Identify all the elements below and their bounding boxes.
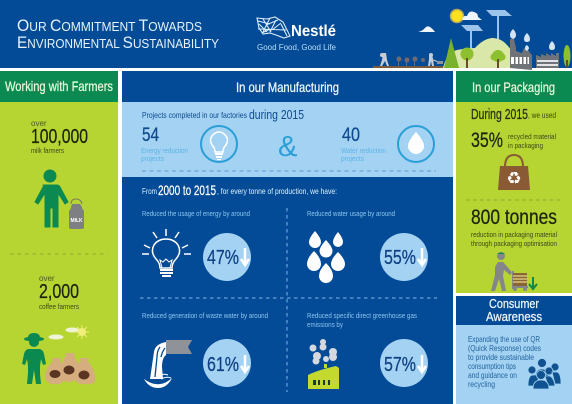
text: from 2000 to 2015 — [142, 182, 337, 198]
stat: 61%: 61% — [207, 354, 239, 376]
icon: bulb in circle — [201, 126, 237, 162]
title: OUR COMMITMENT TOWARDS — [17, 16, 202, 35]
icon: Nestle nest logo — [257, 17, 290, 38]
stat: energy projects: Energy reduction — [141, 146, 188, 155]
text: consumer awareness body: consumption tips — [468, 362, 516, 371]
heading: consumer awareness: Consumer — [489, 296, 540, 311]
text: projects heading: Projects completed in our factories — [142, 110, 247, 120]
text: consumer awareness body: (Quick Response) codes — [468, 344, 541, 353]
illustration: green landscape with factory — [373, 10, 570, 70]
stat: water projects: projects — [341, 154, 364, 163]
stat: milk farmers: 100,000 — [31, 126, 88, 148]
block: water reduction: Reduced water usage by around — [307, 209, 395, 218]
icon: group of people — [528, 358, 561, 389]
heading: in our manufacturing: In our Manufacturing — [236, 79, 339, 95]
logo wordmark: Nestlé — [291, 23, 336, 40]
panel: consumer awareness — [456, 296, 572, 404]
heading: consumer awareness — [456, 296, 572, 325]
title — [17, 16, 219, 52]
title: ENVIRONMENTAL SUSTAINABILITY — [17, 33, 219, 52]
stat: 35% recycled — [471, 129, 556, 152]
block: greenhouse gas reduction: emissions by — [307, 320, 343, 329]
stat: energy projects: 54 — [142, 125, 159, 146]
block: waste water reduction — [142, 311, 268, 388]
stat: 800 tonnes — [471, 206, 557, 248]
block: greenhouse gas reduction: Reduced specific direct greenhouse gas — [307, 311, 417, 320]
text: during 2015 we used: , we used — [528, 111, 556, 120]
icon: water drops — [307, 231, 345, 283]
icon: recycling bag — [498, 155, 530, 190]
stat: coffee farmers: 2,000 — [39, 281, 79, 303]
heading: consumer awareness: Awareness — [486, 309, 542, 324]
text: consumer awareness body: Expanding the use of QR — [468, 335, 540, 344]
panel: working with farmers — [0, 71, 118, 404]
stat: coffee farmers: over — [39, 274, 55, 283]
block: greenhouse gas reduction — [307, 311, 428, 389]
heading: working with farmers — [0, 71, 118, 102]
logo wordmark — [257, 23, 336, 52]
icon: waste water pipe — [144, 340, 192, 388]
stat: 55%: 55% — [384, 247, 416, 269]
icon: drop in circle — [398, 126, 434, 162]
stat: 35% recycled: in packaging — [508, 141, 543, 150]
text: consumer awareness body: to provide sustainable — [468, 353, 534, 362]
stat: 800 tonnes: 800 tonnes — [471, 206, 557, 229]
block: waste water reduction: Reduced generation of waste water by around — [142, 311, 268, 320]
stat: 47%: 47% — [207, 247, 239, 269]
stat: 57%: 57% — [384, 354, 416, 376]
block: energy reduction: Reduced the usage of energy by around — [142, 209, 250, 218]
stat: milk farmers — [31, 119, 88, 155]
text: during 2015 we used: During 2015 — [471, 106, 528, 123]
stat: 35% recycled: 35% — [471, 129, 503, 152]
text: consumer awareness body: and guidance on — [468, 371, 517, 380]
text: from 2000 to 2015: 2000 to 2015 — [158, 182, 216, 198]
stat: coffee farmers: coffee farmers — [39, 302, 79, 311]
stat: milk farmers: milk farmers — [31, 146, 64, 155]
ampersand: & — [278, 131, 297, 163]
panel: in our manufacturing — [122, 71, 453, 404]
header band — [0, 0, 572, 70]
stat: water projects: 40 — [342, 125, 360, 146]
heading: working with farmers: Working with Farmers — [5, 78, 113, 94]
heading: in our packaging — [456, 71, 572, 102]
stat: 800 tonnes: through packaging optimisation — [471, 239, 557, 248]
logo wordmark: Good Food, Good Life — [257, 42, 336, 52]
text: during 2015: during 2015 — [249, 107, 304, 122]
panel: projects completed — [122, 102, 453, 177]
text: from 2000 to 2015: , for every tonne of production, we have: — [217, 186, 337, 196]
icon: recycling bag: ♻ — [506, 169, 522, 189]
block: energy reduction — [142, 209, 251, 281]
stat: milk farmers: over — [31, 119, 47, 128]
stat: 35% recycled: recycled material — [508, 132, 556, 141]
icon: coffee farmer with sacks — [22, 325, 95, 384]
stat: 800 tonnes: reduction in packaging material — [471, 230, 557, 239]
stat: energy projects: projects — [141, 154, 164, 163]
panel: in our packaging — [456, 71, 572, 293]
text: from 2000 to 2015: From — [142, 186, 157, 196]
icon: milk farmer with can — [35, 170, 84, 229]
text: consumer awareness body — [468, 335, 541, 389]
text: consumer awareness body: recycling — [468, 380, 495, 389]
stat: energy projects — [141, 125, 188, 163]
stat: water projects — [341, 125, 386, 163]
block: water reduction — [307, 209, 428, 283]
icon: milk farmer with can: MILK — [70, 218, 83, 224]
stat: water projects: Water reduction — [341, 146, 386, 155]
icon: worker with trolley — [491, 252, 537, 291]
icon: light bulb — [142, 229, 191, 276]
icon: factory with emissions — [308, 339, 339, 389]
stat: coffee farmers — [39, 274, 79, 311]
